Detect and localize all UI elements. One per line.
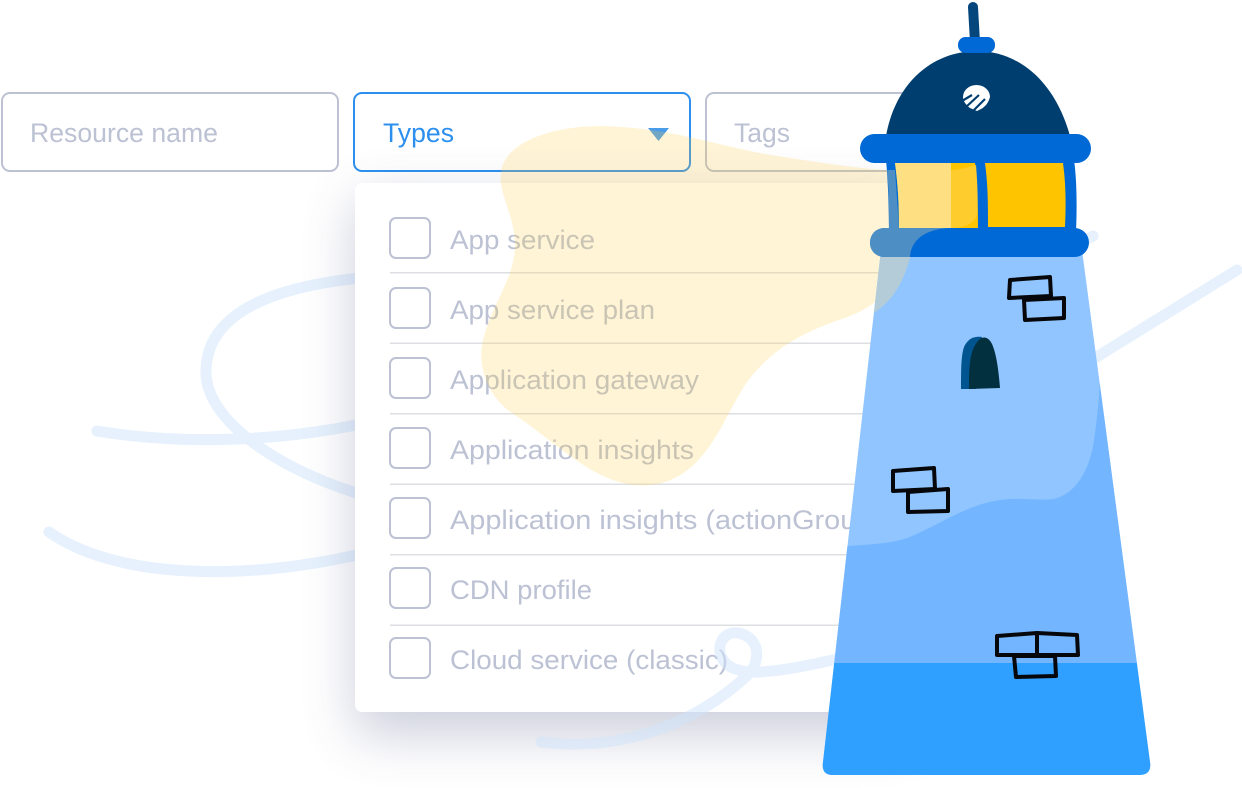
tower [822,254,1150,775]
tower door [961,337,1000,389]
option: App service: App service [450,225,595,255]
resource name field: Resource name [30,118,218,148]
bricks upper [1009,277,1064,320]
option: App service [390,218,595,258]
dome [886,51,1070,136]
lower band [870,228,1089,257]
bricks middle [893,468,948,512]
tower blob tint [874,256,910,312]
option: Application insights: Application insights [450,435,694,465]
option: Application insights [390,428,694,468]
option: Cloud service (classic) [390,638,728,678]
option: CDN profile [390,568,592,608]
types field [354,93,690,171]
bricks lower [997,633,1078,677]
yellow blob [481,126,977,485]
option: Cloud service (classic): Cloud service (classic) [450,645,728,675]
lighthouse [822,2,1150,775]
tags field [706,93,1042,171]
tower base [822,663,1150,775]
window frame overlay [887,170,899,228]
tower middle shade [834,382,1138,665]
foreground swirl [541,633,860,744]
logo [962,85,990,113]
window left [895,163,978,228]
option: App service plan [390,288,655,328]
window left highlight [895,163,951,228]
top band [860,134,1091,163]
cap [958,37,995,53]
window right [985,163,1066,227]
tags field: Tags [734,118,790,148]
lantern frame [886,160,1077,232]
types field: Types [383,118,454,148]
option: App service plan: App service plan [450,295,655,325]
dropdown shadow [355,200,915,735]
option: Application insights (actionGroup): Application insights (actionGroup) [450,505,882,535]
antenna [973,7,975,42]
option: Application gateway: Application gateway [450,365,700,395]
resource name field [2,93,338,171]
option: CDN profile: CDN profile [450,575,592,605]
background swirl: left [49,236,1237,572]
option: Application gateway [390,358,700,398]
option: Application insights (actionGroup) [390,498,882,538]
dropdown panel [355,183,915,712]
